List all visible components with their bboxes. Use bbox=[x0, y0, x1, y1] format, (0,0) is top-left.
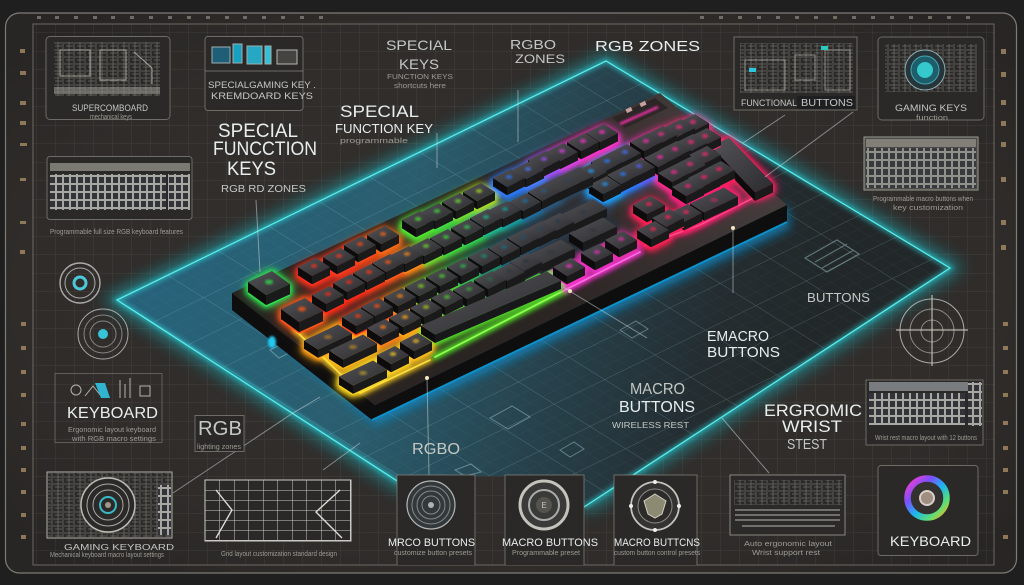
panel: gaming keys with dial: GAMING KEYS bbox=[895, 103, 967, 113]
heading: rgbo zones: RGBO bbox=[510, 37, 556, 52]
panel: function buttons: BUTTONS bbox=[801, 98, 853, 109]
panel: keyboard label: Ergonomic layout keyboard bbox=[68, 427, 156, 434]
panel: gaming keyboard sketch: Mechanical keyboard macro layout settings bbox=[50, 552, 164, 559]
panel: wrist rest sketch: Auto ergonomic layout bbox=[744, 541, 832, 548]
panel: macro buttons 2 bbox=[502, 475, 598, 565]
panel: keyboard keys with cyan icons bbox=[205, 36, 316, 110]
panel: keyboard sketch left bbox=[47, 156, 192, 236]
panel: function buttons bbox=[734, 37, 857, 110]
leader lines bbox=[173, 90, 853, 493]
panel: keyboard sketch right bbox=[866, 380, 983, 445]
heading: special keys: shortcuts here bbox=[394, 83, 446, 90]
icon: badge dial bbox=[629, 480, 681, 532]
heading: special function keys: SPECIAL bbox=[218, 121, 298, 142]
panel: rgb tag: RGB bbox=[198, 418, 242, 440]
panel: gaming keyboard sketch: GAMING KEYBOARD bbox=[64, 543, 174, 552]
heading: special keys bbox=[386, 37, 453, 90]
icon: dial bbox=[81, 478, 135, 532]
heading: special function key bbox=[335, 102, 433, 145]
heading: emacro buttons: BUTTONS bbox=[707, 344, 780, 361]
heading: emacro buttons bbox=[707, 328, 780, 361]
panel: rgb tag bbox=[195, 416, 244, 452]
heading: emacro buttons: EMACRO bbox=[707, 328, 769, 345]
heading: special function key: programmable bbox=[340, 138, 408, 145]
heading: ergonomic wrist rest bbox=[764, 401, 862, 453]
leader dots bbox=[425, 226, 735, 380]
panel: keyboard logo: KEYBOARD bbox=[890, 533, 971, 549]
blue status LED bbox=[268, 336, 276, 348]
keycaps bbox=[246, 114, 775, 397]
panel: blueprint top left bbox=[46, 36, 170, 121]
panel: keyboard label: KEYBOARD bbox=[67, 405, 158, 422]
heading: ergonomic wrist rest: ERGROMIC bbox=[764, 401, 862, 420]
panel: keyboard sketch top right: Programmable macro buttons when bbox=[873, 196, 973, 203]
panel: keyboard grid layout: Grid layout customization standard design bbox=[221, 551, 337, 558]
heading: macro buttons: BUTTONS bbox=[619, 399, 695, 416]
panel: macro buttons 1 bbox=[388, 475, 475, 565]
panel: macro buttons 2: Programmable preset bbox=[512, 550, 580, 557]
heading: special function keys: RGB RD ZONES bbox=[221, 184, 306, 195]
panel: gaming keys with dial: function bbox=[916, 115, 948, 122]
panel: gaming keys with dial bbox=[878, 37, 984, 122]
panel: macro buttons 1: customize button presets bbox=[394, 550, 472, 557]
heading: special function keys bbox=[213, 121, 317, 195]
keyboard bbox=[232, 93, 790, 425]
key underglow bbox=[246, 115, 775, 397]
mat blueprint marks bbox=[270, 240, 859, 476]
panel: keyboard sketch left: Programmable full size RGB keyboard features bbox=[50, 229, 183, 236]
panel: keyboard sketch top right bbox=[864, 137, 978, 212]
heading: rgb zones: RGB ZONES bbox=[595, 38, 700, 55]
icon: fingerprint dial bbox=[407, 481, 455, 529]
icon: crosshair bbox=[896, 295, 968, 366]
panel: keyboard label bbox=[55, 374, 162, 443]
label: rgbo: RGBO bbox=[412, 441, 460, 458]
heading: special function key: SPECIAL bbox=[340, 102, 419, 121]
heading: ergonomic wrist rest: WRIST bbox=[782, 417, 842, 436]
label: buttons: BUTTONS bbox=[807, 290, 870, 305]
desk mat bbox=[117, 61, 950, 507]
panel: macro buttons 1: MRCO BUTTONS bbox=[388, 537, 475, 549]
panel: macro buttons 3: MACRO BUTTCNS bbox=[614, 537, 700, 549]
icon: keyboard glyphs bbox=[71, 378, 150, 398]
media controls bbox=[612, 98, 668, 128]
icon: rgb ring bbox=[908, 478, 946, 518]
icon: small target bbox=[60, 263, 100, 303]
panel: macro buttons 3: custom button control presets bbox=[614, 550, 700, 557]
panel: function buttons: FUNCTIONAL bbox=[741, 98, 797, 108]
icon: target bbox=[78, 309, 128, 359]
heading: special function key: FUNCTION KEY bbox=[335, 121, 433, 136]
heading: special keys: SPECIAL bbox=[386, 37, 452, 53]
panel: wrist rest sketch bbox=[730, 475, 845, 557]
keyboard shadow and blue glow bbox=[232, 205, 790, 425]
icon row bbox=[212, 44, 297, 64]
panel: keyboard keys with cyan icons: KREMDOARD KEYS bbox=[211, 91, 313, 101]
panel: keyboard sketch right: Wrist rest macro layout with 12 buttons bbox=[875, 435, 977, 442]
panel: gaming keyboard sketch bbox=[47, 472, 174, 559]
heading: special function keys: FUNCCTION bbox=[213, 139, 317, 160]
heading: macro buttons: WIRELESS REST bbox=[612, 421, 689, 430]
panel: keyboard sketch top right: key customization bbox=[893, 205, 963, 212]
heading: rgbo zones: ZONES bbox=[515, 52, 565, 66]
heading: macro buttons bbox=[612, 381, 695, 430]
heading: special keys: FUNCTION KEYS bbox=[387, 74, 453, 81]
panel: macro buttons 3 bbox=[614, 475, 700, 565]
icon: shutter dial: E bbox=[541, 501, 547, 510]
heading: special function keys: KEYS bbox=[227, 159, 276, 180]
panel: rgb tag: lighting zones bbox=[197, 444, 242, 451]
keyboard top plate bbox=[232, 93, 787, 405]
heading: macro buttons: MACRO bbox=[630, 381, 685, 398]
panel: keyboard keys with cyan icons: SPECIALGAMING KEY . bbox=[208, 80, 316, 90]
panel: keyboard logo bbox=[878, 466, 978, 556]
panel: keyboard grid layout bbox=[205, 480, 351, 558]
panel: keyboard label: with RGB macro settings bbox=[71, 436, 157, 443]
heading: ergonomic wrist rest: STEST bbox=[787, 436, 827, 453]
keyboard side faces bbox=[232, 205, 787, 420]
panel: macro buttons 2: MACRO BUTTONS bbox=[502, 537, 598, 549]
heading: special keys: KEYS bbox=[399, 56, 439, 72]
panel: wrist rest sketch: Wrist support rest bbox=[752, 550, 820, 557]
panel: blueprint top left: mechanical keys bbox=[90, 114, 132, 121]
heading: rgbo zones bbox=[510, 37, 565, 66]
front edge light strip bbox=[295, 192, 765, 393]
panel: blueprint top left: SUPERCOMBOARD bbox=[72, 103, 148, 113]
icon: cyan dial bbox=[905, 50, 945, 90]
